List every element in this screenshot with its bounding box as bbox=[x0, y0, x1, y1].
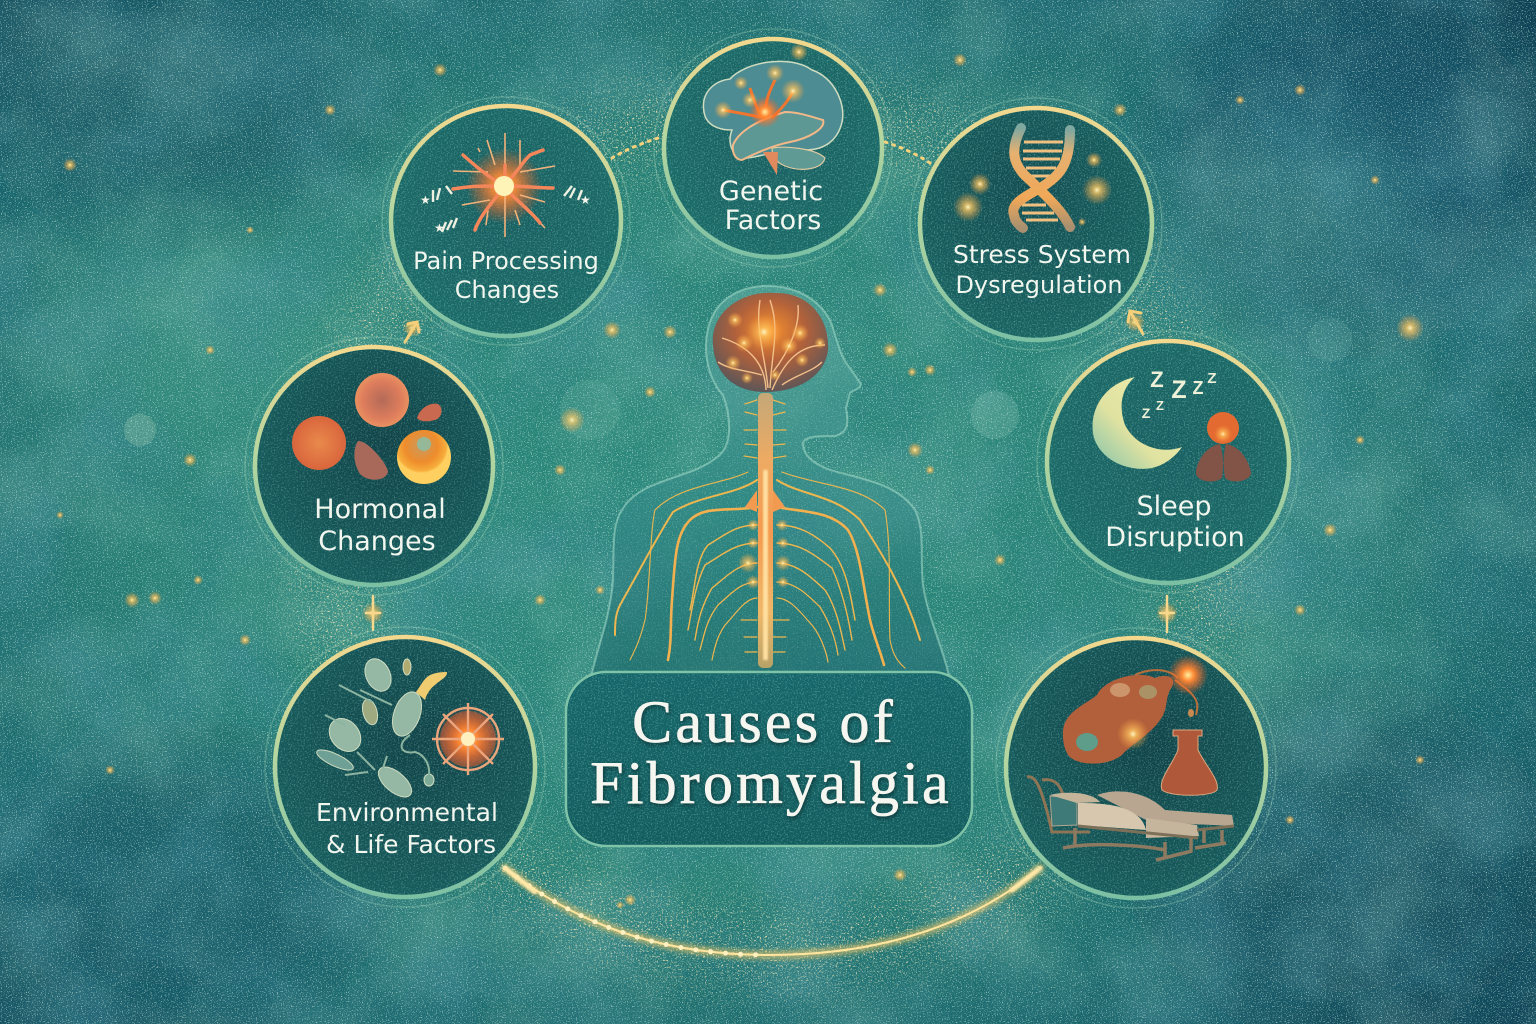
panel: genetic factors: Factors bbox=[725, 205, 821, 236]
brain bbox=[713, 293, 828, 392]
icon: nerve burst bbox=[420, 133, 591, 237]
icon: liver organ bbox=[1063, 655, 1208, 764]
body silhouette bbox=[588, 286, 952, 690]
icon: lounge bed bbox=[1027, 777, 1234, 860]
panel: organs and rest bbox=[996, 628, 1276, 908]
icon: zzz: Z bbox=[1150, 367, 1164, 392]
panel: environmental and life factors bbox=[265, 627, 545, 907]
panel: stress system dysregulation bbox=[910, 98, 1162, 350]
panel: pain processing changes bbox=[382, 97, 630, 345]
panel: hormonal changes bbox=[245, 337, 503, 595]
label: Genetic bbox=[719, 176, 823, 207]
panel: pain processing changes: Changes bbox=[455, 276, 559, 304]
icon: flask bbox=[1161, 730, 1217, 795]
icon: brain bbox=[703, 43, 843, 175]
panel: genetic factors bbox=[654, 29, 892, 267]
icon: virus burst bbox=[432, 703, 504, 775]
icon: microbes bbox=[314, 655, 447, 803]
label: Stress System bbox=[953, 240, 1131, 269]
title box: Fibromyalgia bbox=[590, 750, 952, 816]
label: Hormonal bbox=[314, 494, 446, 525]
panel: environmental and life factors: & Life Factors bbox=[326, 830, 496, 859]
icon: crescent moon bbox=[1093, 377, 1182, 469]
spine bbox=[758, 393, 773, 668]
icon: dna helix bbox=[953, 128, 1112, 228]
panel: hormonal changes: Changes bbox=[318, 526, 436, 557]
label: Sleep bbox=[1136, 491, 1212, 522]
icon: zzz: Z bbox=[1156, 398, 1164, 413]
icon: adrenal glands bbox=[1196, 412, 1251, 481]
panel: sleep disruption bbox=[1037, 331, 1299, 593]
panel: sleep disruption: Disruption bbox=[1105, 522, 1245, 553]
panel: stress system dysregulation: Dysregulation bbox=[955, 271, 1123, 299]
central human figure bbox=[588, 286, 952, 690]
icon: zzz: Z bbox=[1142, 405, 1151, 421]
arrow: bottom right to sleep bbox=[1156, 596, 1178, 632]
icon: nerve burst: ★ bbox=[580, 193, 591, 207]
label: Pain Processing bbox=[413, 247, 599, 275]
icon: zzz: Z bbox=[1207, 370, 1217, 387]
icon: hormone cells bbox=[292, 373, 451, 484]
arrow: environmental to hormonal bbox=[362, 596, 384, 630]
icon: zzz: Z bbox=[1192, 378, 1204, 398]
icon: nerve burst: ★ bbox=[434, 221, 445, 235]
arrow: sleep to stress bbox=[1125, 311, 1145, 334]
arrow: hormonal to pain bbox=[403, 319, 421, 342]
nerve branches bbox=[615, 400, 920, 668]
title: Causes of bbox=[632, 689, 896, 755]
orbit ring connecting circles bbox=[505, 138, 1040, 955]
icon: zzz: Z bbox=[1171, 376, 1187, 404]
title box bbox=[566, 672, 972, 846]
icon: nerve burst: ★ bbox=[420, 193, 431, 207]
icon: zzz bbox=[1142, 367, 1217, 421]
label: Environmental bbox=[316, 798, 498, 827]
